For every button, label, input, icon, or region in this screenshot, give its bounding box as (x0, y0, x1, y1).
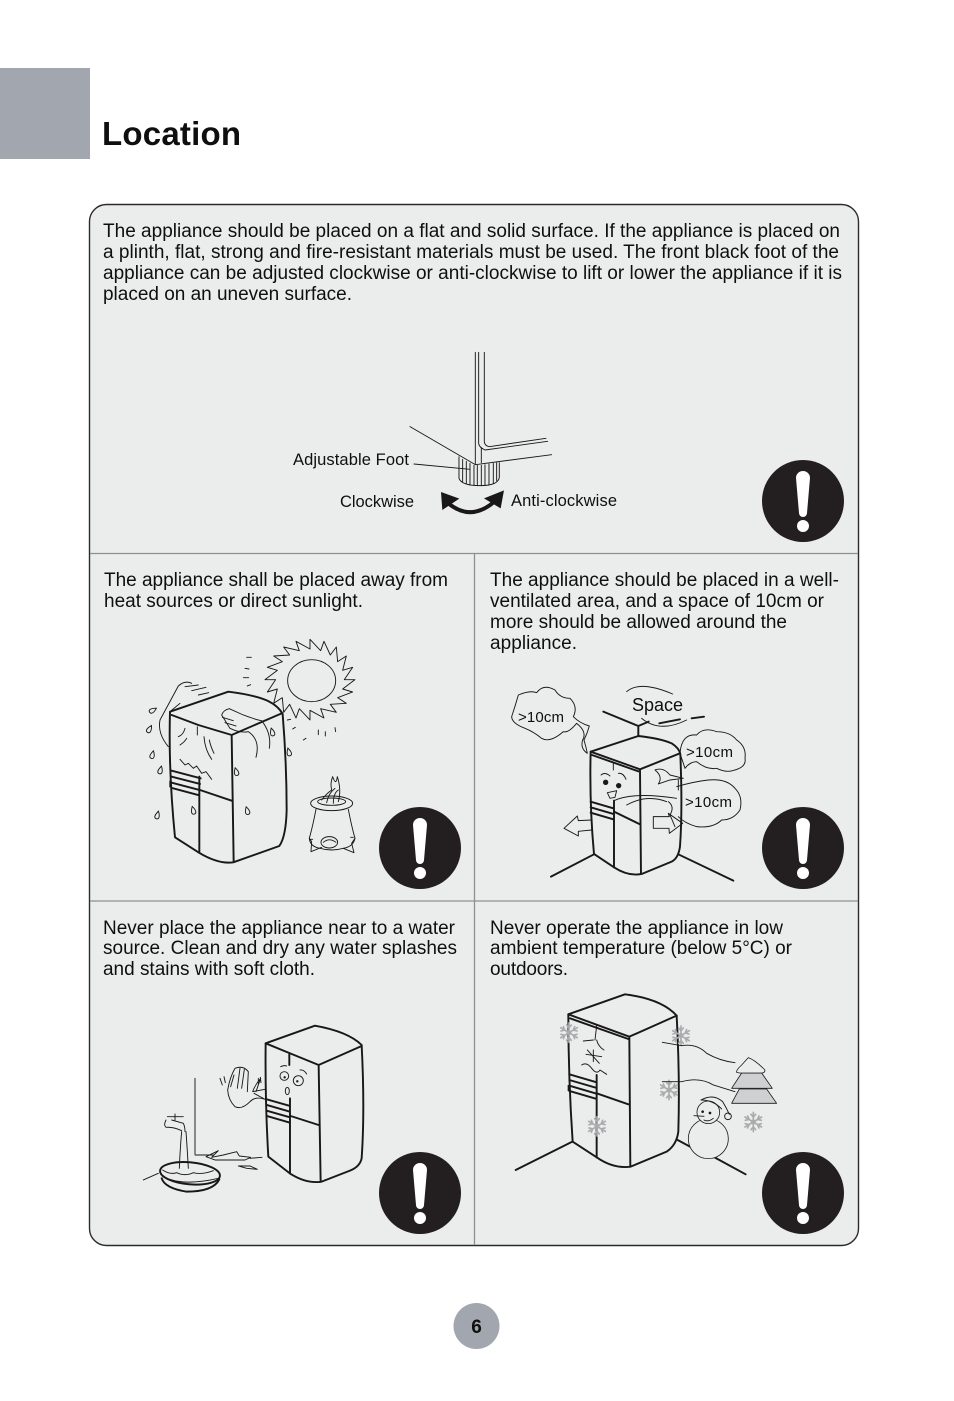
text block: heat sources: heat sources or direct sunlight. (104, 591, 363, 612)
warning icon: surface (762, 460, 844, 542)
text block: low temperature: Never operate the appliance in low (490, 918, 783, 939)
grey corner tab (0, 68, 90, 159)
text block: flat surface: a plinth, flat, strong and fire-resistant materials must be used. The front black foot of the (103, 242, 839, 263)
right hand and arm (222, 709, 270, 757)
fire pot (309, 777, 355, 853)
tree (732, 1058, 777, 1103)
label: lower right clearance: >10cm (685, 794, 732, 811)
illustration: fridge near water (143, 1026, 363, 1192)
illustration: fridge in cold (516, 994, 777, 1174)
cracked face (582, 1026, 607, 1074)
warning icon: ventilation (762, 807, 844, 889)
cloud: lower right (677, 780, 741, 827)
label: anti-clockwise: Anti-clockwise (511, 492, 617, 510)
text block: ventilation (490, 570, 839, 654)
label: clockwise: Clockwise (340, 493, 414, 511)
label: adjustable foot: Adjustable Foot (293, 451, 409, 469)
illustration: fridge in heat (146, 639, 355, 863)
floor lines (516, 1140, 746, 1174)
text block: water: source. Clean and dry any water splashes (103, 938, 457, 959)
text block: flat surface: The appliance should be placed on a flat and solid surface. If the appliance is placed on (103, 221, 840, 242)
warning icon: cold (762, 1152, 844, 1234)
text block: flat surface: appliance can be adjusted clockwise or anti-clockwise to lift or lower the appliance if it is (103, 263, 842, 284)
waving hand (220, 1067, 265, 1108)
face (601, 763, 626, 779)
text block: water (103, 918, 457, 980)
wind lines (662, 1042, 735, 1092)
main panel (90, 204, 858, 1246)
label: upper right clearance: >10cm (686, 744, 733, 761)
cloud: left (512, 687, 589, 753)
bowl (159, 1160, 221, 1192)
faucet (165, 1114, 188, 1168)
label: space: Space (632, 695, 683, 715)
text block: ventilation: more should be allowed around the (490, 612, 787, 633)
text block: water: and stains with soft cloth. (103, 959, 315, 980)
label: left clearance: >10cm (518, 709, 564, 726)
arrow: right (653, 813, 683, 833)
text block: ventilation: The appliance should be placed in a well- (490, 570, 839, 591)
text block: low temperature (490, 918, 793, 980)
left hand and arm (159, 682, 209, 747)
text block: low temperature: outdoors. (490, 959, 568, 980)
illustration: adjustable foot (410, 352, 552, 512)
snowman (688, 1097, 731, 1159)
text block: flat surface (103, 221, 842, 305)
illustration: fridge with clearance (512, 686, 745, 881)
sun (243, 639, 355, 740)
arrow: left (564, 816, 592, 836)
face (281, 1066, 307, 1074)
page number badge (454, 1303, 500, 1349)
text block: heat sources: The appliance shall be placed away from (104, 570, 448, 591)
text block: ventilation: ventilated area, and a space of 10cm or (490, 591, 825, 612)
warning icon: heat (379, 807, 461, 889)
top curves (627, 686, 687, 726)
sweat drops (146, 706, 292, 819)
cloud: upper right (680, 730, 745, 771)
floor and wall lines (551, 712, 733, 881)
text block: heat sources (104, 570, 448, 612)
worried face (178, 727, 214, 779)
wall and floor lines (143, 1078, 262, 1180)
text block: flat surface: placed on an uneven surface. (103, 284, 352, 305)
warning icon: water (379, 1152, 461, 1234)
page number badge: 6 (471, 1317, 482, 1338)
title: Location (102, 115, 241, 152)
text block: water: Never place the appliance near to a water (103, 918, 456, 939)
snowflakes (561, 1023, 762, 1136)
text block: ventilation: appliance. (490, 633, 577, 654)
text block: low temperature: ambient temperature (below 5°C) or (490, 938, 793, 959)
water puddles (206, 1151, 257, 1169)
